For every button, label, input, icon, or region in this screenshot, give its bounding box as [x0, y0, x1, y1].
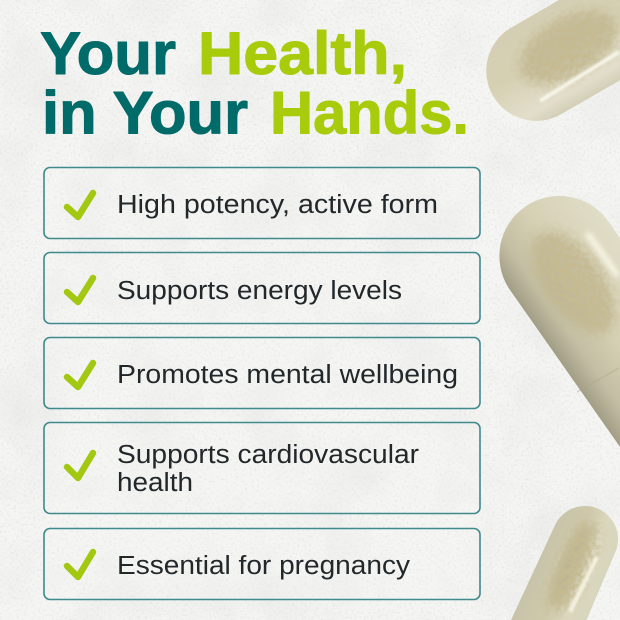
benefit: high potency: High potency, active form [117, 191, 438, 219]
benefit: pregnancy [44, 528, 480, 600]
title: Your [40, 20, 176, 87]
capsule: bottom right [511, 506, 618, 620]
benefit: energy levels: Supports energy levels [117, 277, 402, 305]
benefit: cardiovascular health: Supports cardiovascular [117, 441, 420, 469]
benefit: cardiovascular health [44, 422, 480, 514]
benefit: cardiovascular health: health [117, 469, 193, 497]
benefit: pregnancy: Essential for pregnancy [117, 552, 410, 580]
title: Hands. [270, 80, 469, 146]
title: Health, [198, 20, 407, 87]
benefit: energy levels [44, 252, 480, 324]
capsule: top right [486, 0, 620, 121]
benefit: mental wellbeing [44, 338, 480, 408]
benefit: high potency [44, 168, 480, 238]
title: in Your [42, 80, 248, 146]
benefit: mental wellbeing: Promotes mental wellbeing [117, 361, 458, 389]
title [40, 20, 469, 146]
capsule: middle right [499, 196, 620, 447]
